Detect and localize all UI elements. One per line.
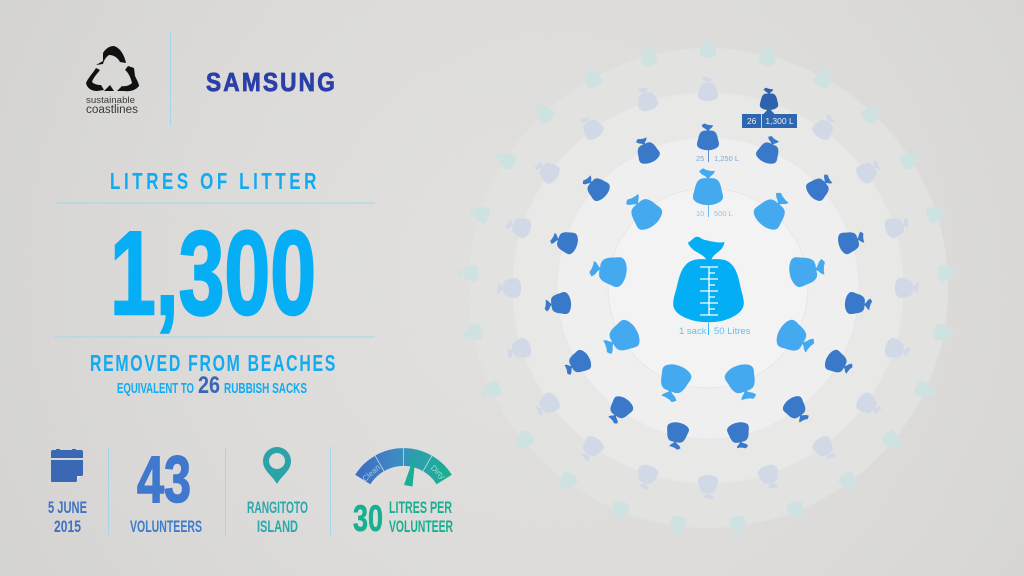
highlighted sack 26 with callout: 1,300 L <box>765 116 794 126</box>
volunteers count: 43 <box>137 442 191 516</box>
subheading: removed from beaches: REMOVED FROM BEACHES <box>90 350 337 376</box>
location text: ISLAND <box>257 518 298 536</box>
gauge: clean to dirty: Dirty <box>429 463 447 481</box>
volunteers count: VOLUNTEERS <box>130 518 202 536</box>
label: 25 sacks, 1,250 L: 1,250 L <box>714 154 739 163</box>
date text: 2015 <box>54 518 81 536</box>
equivalent sacks line: RUBBISH SACKS <box>224 381 307 397</box>
third ring: faded blue sacks <box>497 77 919 499</box>
highlighted sack 26 with callout <box>742 88 797 128</box>
concentric rings <box>468 48 948 528</box>
equivalent sacks line: EQUIVALENT TO <box>117 381 194 397</box>
label: 1 sack, 50 litres: 50 Litres <box>714 326 751 337</box>
litres per volunteer: VOLUNTEER <box>389 518 453 536</box>
sustainable coastlines logo: coastlines <box>86 104 138 116</box>
litres per volunteer: 30 <box>353 498 383 539</box>
outer ring: faded teal sacks <box>458 38 958 537</box>
sustainable coastlines logo: sustainable <box>86 95 135 106</box>
date text: 5 JUNE <box>48 499 87 517</box>
samsung logo: SAMSUNG <box>206 67 337 97</box>
heading: litres of litter: LITRES OF LITTER <box>110 168 320 194</box>
location text: RANGITOTO <box>247 499 308 517</box>
date text <box>48 499 87 536</box>
location text <box>247 499 308 536</box>
highlighted sack 26 with callout: 26 <box>747 116 757 126</box>
icon: map pin <box>263 447 291 484</box>
label: 1 sack, 50 litres <box>679 323 751 337</box>
inner ring: light blue sacks <box>588 169 828 405</box>
label: 10 sacks, 500 L: 10 <box>696 209 704 218</box>
central sack with scale <box>673 237 744 322</box>
litres per volunteer <box>353 498 453 539</box>
gauge: clean to dirty <box>355 448 452 486</box>
label: 25 sacks, 1,250 L <box>696 150 739 163</box>
equivalent sacks line: 26 <box>198 372 220 399</box>
gauge: clean to dirty: Clean <box>361 463 382 483</box>
icon: calendar <box>51 449 83 482</box>
label: 10 sacks, 500 L <box>696 205 733 218</box>
label: 25 sacks, 1,250 L: 25 <box>696 154 704 163</box>
volunteers count <box>130 442 202 536</box>
litres per volunteer: LITRES PER <box>389 499 452 517</box>
label: 1 sack, 50 litres: 1 sack <box>679 326 707 337</box>
big number: 1,300: 1,300 <box>110 207 316 340</box>
second ring: dark blue sacks <box>543 123 873 451</box>
sustainable coastlines logo <box>86 46 139 116</box>
label: 10 sacks, 500 L: 500 L <box>714 209 733 218</box>
equivalent sacks line <box>117 372 307 399</box>
